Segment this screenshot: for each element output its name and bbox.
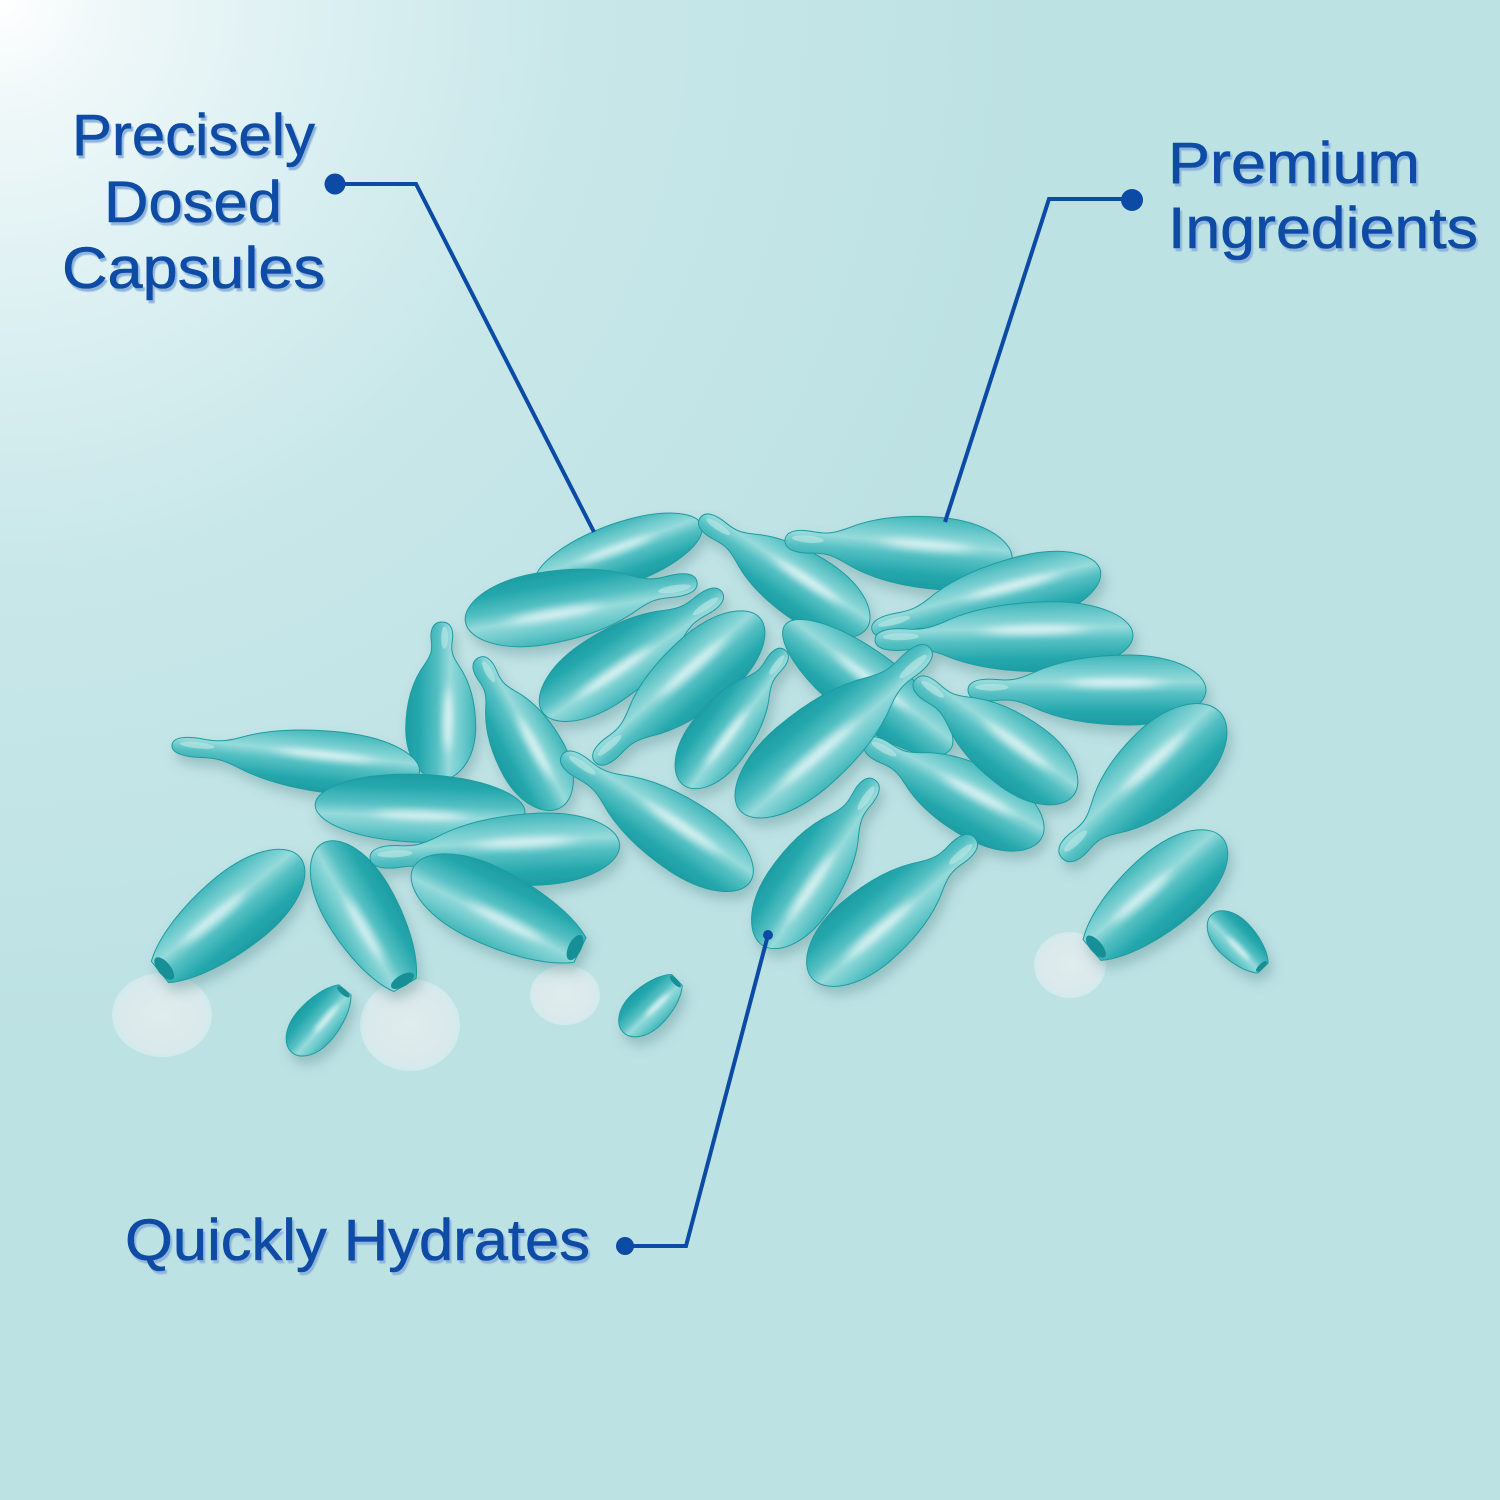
callout line: quickly hydrates [616, 930, 773, 1255]
callout line: precisely dosed capsules [324, 174, 594, 532]
label: precisely dosed capsules: Capsules [62, 236, 325, 301]
label: premium ingredients: Ingredients [1168, 196, 1478, 261]
label: quickly hydrates: Quickly Hydrates [125, 1208, 590, 1273]
label: precisely dosed capsules [62, 103, 325, 301]
label: precisely dosed capsules: Dosed [104, 170, 282, 235]
capsule cluster [135, 490, 1278, 1067]
callout line: premium ingredients [945, 189, 1143, 522]
label: premium ingredients [1168, 131, 1478, 261]
melted capsule droplets [112, 932, 1106, 1071]
label: premium ingredients: Premium [1168, 131, 1420, 196]
label: precisely dosed capsules: Precisely [72, 103, 315, 168]
